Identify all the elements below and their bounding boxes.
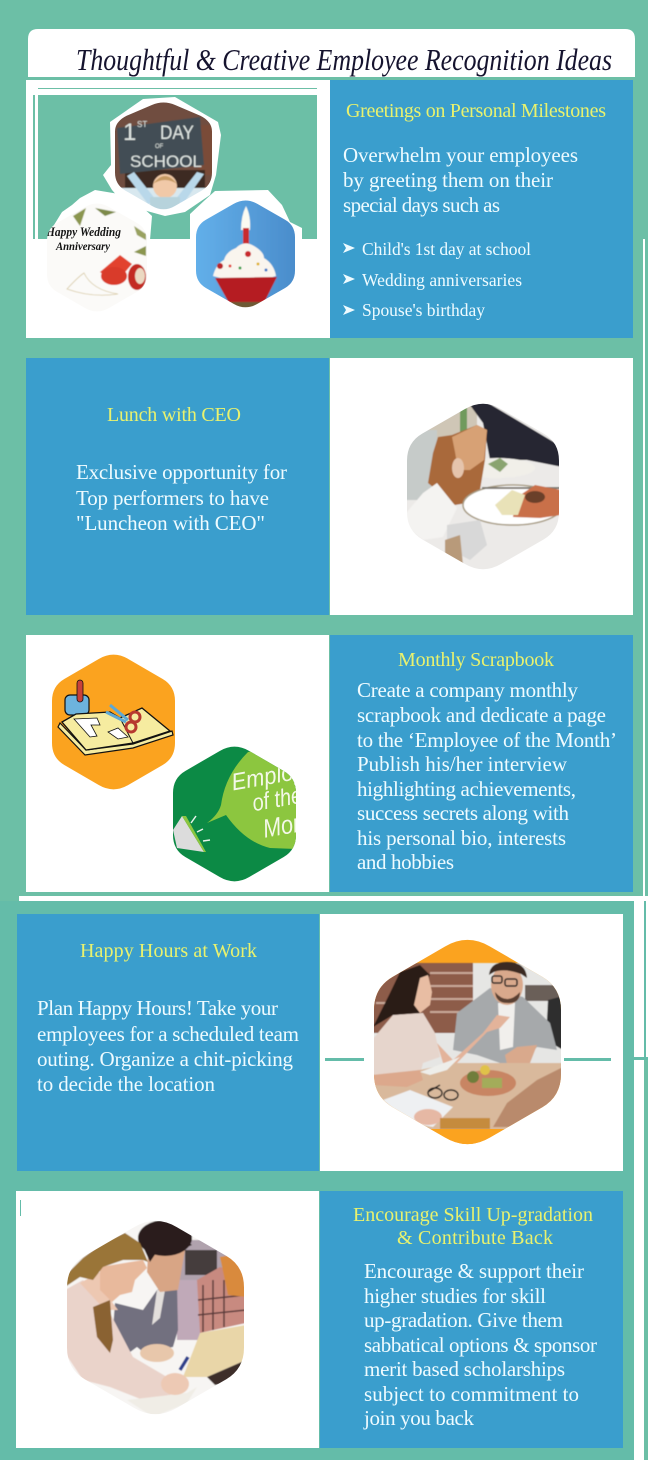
- text block: skill up-gradation: higher studies for skill: [364, 1284, 546, 1308]
- text block: scrapbook: scrapbook and dedicate a page: [357, 703, 606, 727]
- heading: greetings: Greetings on Personal Milestones: [346, 100, 606, 122]
- icon: employee of the month hexagon: [173, 746, 296, 882]
- icon: first day of school photo: DAY: [160, 123, 194, 144]
- heading: lunch: Lunch with CEO: [107, 404, 241, 426]
- icon: first day of school photo: ST: [137, 120, 147, 129]
- text block: greetings intro: Overwhelm your employees: [343, 143, 578, 167]
- icon: employee of the month hexagon: Month: [260, 804, 325, 844]
- text block: scrapbook: [357, 678, 617, 874]
- text block: happy hours: [37, 996, 299, 1096]
- text block: happy hours: employees for a scheduled team: [37, 1022, 299, 1046]
- icon: team outing photo: [372, 937, 563, 1147]
- list: milestones: [343, 239, 531, 320]
- text block: lunch: Exclusive opportunity for: [76, 460, 287, 484]
- text block: happy hours: to decide the location: [37, 1072, 216, 1096]
- panel: monthly scrapbook: [26, 635, 633, 892]
- text block: skill up-gradation: sabbatical options & sponsor: [364, 1333, 597, 1357]
- text block: scrapbook: his personal bio, interests: [357, 826, 566, 850]
- title banner: [28, 29, 635, 77]
- panel: encourage skill up-gradation: [16, 1191, 623, 1448]
- text block: skill up-gradation: Encourage & support their: [364, 1259, 584, 1283]
- icon: students studying photo: [65, 1218, 246, 1417]
- icon: first day of school photo: SCHOOL: [130, 152, 202, 171]
- icon: employee of the month hexagon: of the: [250, 782, 304, 817]
- heading: skill up-gradation: [353, 1204, 593, 1249]
- text block: happy hours: outing. Organize a chit-picking: [37, 1047, 294, 1071]
- text block: lunch: [76, 460, 287, 535]
- text block: happy hours: Plan Happy Hours! Take your: [37, 996, 278, 1020]
- panel: happy hours at work: [17, 914, 623, 1171]
- icon: first day of school photo: OF: [155, 144, 164, 150]
- text block: greetings intro: by greeting them on their: [343, 168, 553, 192]
- text block: skill up-gradation: up-gradation. Give them: [364, 1308, 563, 1332]
- heading: skill up-gradation: & Contribute Back: [397, 1227, 553, 1249]
- text block: scrapbook: and hobbies: [357, 850, 454, 874]
- icon: first day of school photo: [113, 100, 214, 212]
- heading: happy hours: Happy Hours at Work: [80, 940, 257, 962]
- panel: greetings on personal milestones: [26, 80, 633, 338]
- text block: greetings intro: [343, 143, 578, 217]
- text block: lunch: "Luncheon with CEO": [76, 511, 265, 535]
- text block: skill up-gradation: subject to commitment to: [364, 1382, 579, 1406]
- icon: scrapbook hexagon: [52, 655, 175, 789]
- list: milestones: Child's 1st day at school: [362, 239, 531, 259]
- text block: skill up-gradation: merit based scholarships: [364, 1357, 565, 1381]
- text block: scrapbook: highlighting achievements,: [357, 777, 576, 801]
- text block: lunch: Top performers to have: [76, 486, 269, 510]
- icon: employee of the month hexagon: Employee: [229, 753, 331, 796]
- text block: scrapbook: to the ‘Employee of the Month’: [357, 728, 617, 752]
- icon: handshake lunch photo: [405, 400, 563, 572]
- icon: birthday cupcake photo: [194, 198, 297, 310]
- list: milestones: Wedding anniversaries: [362, 270, 522, 290]
- icon: wedding anniversary photo: [47, 207, 147, 297]
- icon: wedding anniversary photo: Anniversary: [55, 241, 111, 253]
- heading: skill up-gradation: Encourage Skill Up-gradation: [353, 1204, 593, 1226]
- heading: scrapbook: Monthly Scrapbook: [398, 649, 554, 671]
- list: milestones: Spouse's birthday: [362, 300, 485, 320]
- text block: skill up-gradation: [363, 1259, 597, 1430]
- text block: skill up-gradation: join you back: [363, 1406, 474, 1430]
- icon: first day of school photo: 1: [123, 119, 136, 146]
- panel: lunch with CEO: [26, 358, 633, 615]
- text block: scrapbook: Publish his/her interview: [357, 752, 568, 776]
- text block: greetings intro: special days such as: [343, 193, 500, 217]
- text block: scrapbook: success secrets along with: [357, 801, 570, 825]
- text block: scrapbook: Create a company monthly: [357, 678, 578, 702]
- icon: wedding anniversary photo: Happy Wedding: [45, 225, 121, 239]
